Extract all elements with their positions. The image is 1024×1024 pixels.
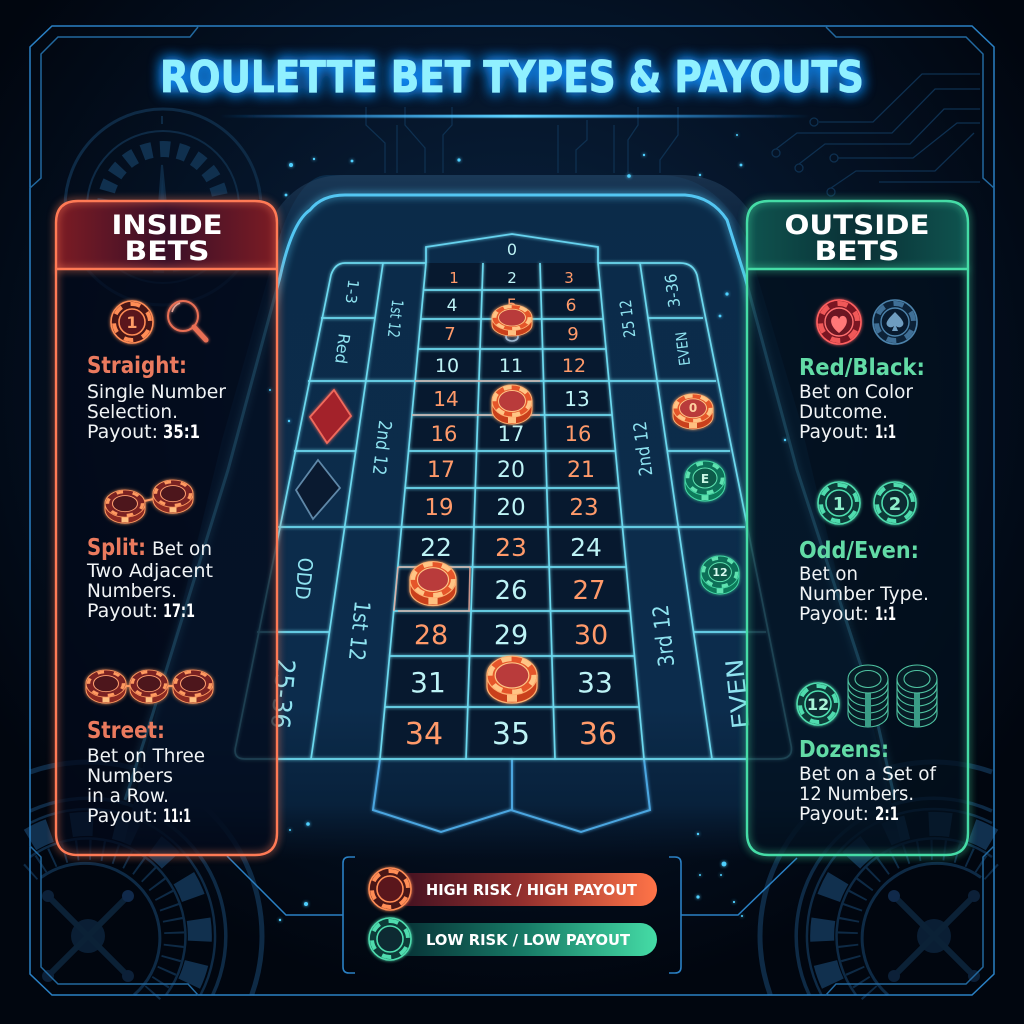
chip labels on table: 0 — [689, 401, 697, 415]
chip labels on table: 12 — [712, 566, 728, 579]
legend: high risk pill — [392, 873, 657, 906]
table: side labels: EVEN — [720, 658, 756, 730]
table: number grid: 34 — [405, 717, 443, 752]
straight text: Straight: — [87, 353, 187, 379]
table: number grid: 36 — [579, 717, 617, 752]
table: number grid: 7 — [444, 324, 456, 345]
street text: Payout: — [87, 805, 158, 827]
table: side labels: Red — [331, 332, 354, 365]
outside panel body — [747, 201, 968, 855]
panel: inside bets — [56, 201, 277, 855]
table: side labels: 1-3 — [342, 278, 362, 305]
table: number grid: 2 — [507, 269, 517, 287]
straight text: Selection. — [87, 401, 178, 423]
dozens text: Bet on a Set of — [799, 763, 937, 785]
table: number grid: 12 — [562, 355, 586, 377]
icon: split chips — [105, 480, 193, 523]
table: number grid — [405, 269, 617, 752]
red/black text: Bet on Color — [799, 381, 913, 403]
dozens text — [799, 737, 937, 825]
table: number grid: 24 — [570, 533, 602, 562]
table: number grid: 10 — [435, 355, 459, 377]
table: number grid: 19 — [424, 495, 454, 521]
odd/even text: Payout: — [799, 603, 869, 625]
table: number grid: 6 — [566, 296, 576, 316]
table: number grid: 23 — [569, 495, 599, 521]
inside heading: INSIDE — [112, 210, 222, 241]
table: side labels: 3rd 12 — [649, 604, 680, 668]
icon: dozens chip — [797, 683, 839, 725]
legend: green chip — [369, 918, 411, 960]
table: number grid: 30 — [574, 620, 608, 651]
background: circuit traces — [366, 74, 980, 196]
split text: Two Adjacent — [86, 560, 213, 582]
table: bottom pockets — [373, 759, 650, 832]
table: glowing rim line — [125, 195, 895, 800]
icon: street chips — [86, 670, 213, 703]
street text: Bet on Three — [87, 745, 205, 767]
table: red diamond — [310, 390, 351, 443]
odd/even text: Bet on — [799, 563, 858, 585]
table: highlighted cells — [394, 381, 540, 611]
table: side labels: 2nd 12 — [368, 419, 395, 476]
table: zero pocket — [426, 234, 598, 263]
odd/even text: Number Type. — [799, 583, 929, 605]
table: number grid: 27 — [572, 576, 606, 606]
roulette table — [120, 175, 905, 860]
red/black text: Payout: — [799, 421, 869, 443]
table: outer rim band — [276, 175, 750, 248]
red/black text — [799, 355, 925, 443]
icon: chips 1 and 2 — [818, 482, 916, 524]
table: number grid: 23 — [495, 533, 527, 562]
table: number grid: 21 — [567, 458, 595, 483]
odd/even text — [799, 538, 929, 625]
legend: low risk pill — [392, 923, 657, 956]
legend: low risk label: LOW RISK / LOW PAYOUT — [426, 931, 631, 949]
table: number grid: 28 — [414, 620, 448, 651]
icon: chip 1 — [111, 301, 153, 343]
table: grid lines — [235, 263, 791, 759]
table: zero label: 0 — [507, 240, 517, 259]
icon: dozens chip: 12 — [807, 695, 829, 714]
panel: outside bets — [747, 201, 968, 855]
dozens text: 12 Numbers. — [799, 783, 914, 805]
table: number grid: 29 — [494, 620, 528, 651]
odd/even text: 1:1 — [875, 603, 896, 625]
red/black text: Dutcome. — [799, 401, 888, 423]
inside heading — [112, 210, 222, 267]
table: number grid: 13 — [564, 387, 590, 411]
odd/even text: Odd/Even: — [799, 538, 919, 564]
inside heading: BETS — [124, 236, 210, 267]
table: number grid: 9 — [567, 324, 579, 345]
split text — [86, 535, 213, 622]
table: number grid: 26 — [494, 576, 528, 606]
street text: in a Row. — [87, 785, 169, 807]
chip labels on table: E — [701, 472, 709, 486]
table: number cell backgrounds — [380, 263, 644, 759]
icon: spade chip — [873, 300, 917, 344]
table: side labels: ODD — [290, 557, 318, 601]
icon: heart chip — [817, 300, 861, 344]
table: side labels: EVEN — [672, 331, 694, 367]
street text: Numbers — [87, 765, 173, 787]
inside panel border — [56, 201, 277, 855]
table: number grid: 20 — [496, 495, 526, 521]
table: number grid: 16 — [431, 422, 457, 446]
table: number grid: 3 — [564, 269, 574, 287]
table: number grid: 22 — [420, 533, 452, 562]
legend: red chip — [369, 868, 411, 910]
table: side labels: 1st 12 — [384, 299, 407, 339]
legend: high risk label: HIGH RISK / HIGH PAYOUT — [426, 881, 638, 899]
chips on table — [410, 305, 739, 703]
icon: chips 1 and 2: 2 — [889, 494, 901, 515]
legend brackets — [343, 857, 681, 973]
table: number grid: 11 — [499, 355, 523, 377]
table: side labels: 25-36 — [264, 658, 300, 730]
table: side labels: 3-36 — [661, 273, 684, 309]
outside heading: OUTSIDE — [784, 210, 930, 241]
outside heading — [784, 210, 930, 267]
title: ROULETTE BET TYPES & PAYOUTS — [160, 52, 864, 103]
table: number grid: 20 — [497, 458, 525, 483]
icon: magnifier — [168, 301, 206, 340]
inside panel body — [56, 201, 277, 855]
table: number grid: 1 — [449, 269, 459, 287]
split text: Numbers. — [87, 580, 177, 602]
table: number grid: 35 — [492, 717, 530, 752]
table: number grid: 5 — [507, 296, 517, 316]
street text: 11:1 — [163, 805, 191, 827]
table: felt surface — [120, 175, 905, 860]
icon: chip stacks — [848, 665, 937, 727]
split text: Split: — [87, 535, 146, 561]
icon: chips 1 and 2: 1 — [833, 494, 845, 515]
outside panel border — [747, 201, 968, 855]
dozens text: 2:1 — [875, 803, 899, 825]
legend — [343, 857, 681, 973]
table: side labels: 2nd 12 — [630, 420, 657, 477]
table: number grid: 14 — [433, 387, 459, 411]
chip labels on table — [689, 401, 728, 579]
straight text: Single Number — [87, 381, 226, 403]
table: number grid: 4 — [447, 296, 457, 316]
straight text — [87, 353, 226, 443]
title underline — [220, 115, 810, 118]
icon: chip 1: 1 — [126, 313, 138, 332]
table: black diamond — [296, 460, 340, 519]
dozens text: Payout: — [799, 803, 869, 825]
table: number grid: 17 — [427, 458, 455, 483]
table: number grid: 16 — [565, 422, 591, 446]
table: number grid: 33 — [577, 666, 613, 699]
table: side labels: 1st 12 — [343, 600, 374, 662]
sparkles — [269, 134, 786, 921]
split text: Payout: — [87, 600, 158, 622]
split text: Bet on — [152, 538, 212, 560]
table: side labels: 25 12 — [616, 299, 639, 339]
split text: 17:1 — [163, 600, 195, 622]
straight text: Payout: — [87, 421, 158, 443]
outside panel header — [747, 201, 968, 269]
table: number grid: 17 — [498, 422, 524, 446]
red/black text: Red/Black: — [799, 355, 925, 381]
street text — [87, 718, 205, 827]
table: side labels — [264, 273, 756, 730]
straight text: 35:1 — [163, 421, 200, 443]
inside panel header — [56, 201, 277, 269]
red/black text: 1:1 — [875, 421, 896, 443]
dozens text: Dozens: — [799, 737, 889, 763]
outside heading: BETS — [814, 236, 900, 267]
table: number grid: 31 — [410, 666, 446, 699]
street text: Street: — [87, 718, 165, 744]
